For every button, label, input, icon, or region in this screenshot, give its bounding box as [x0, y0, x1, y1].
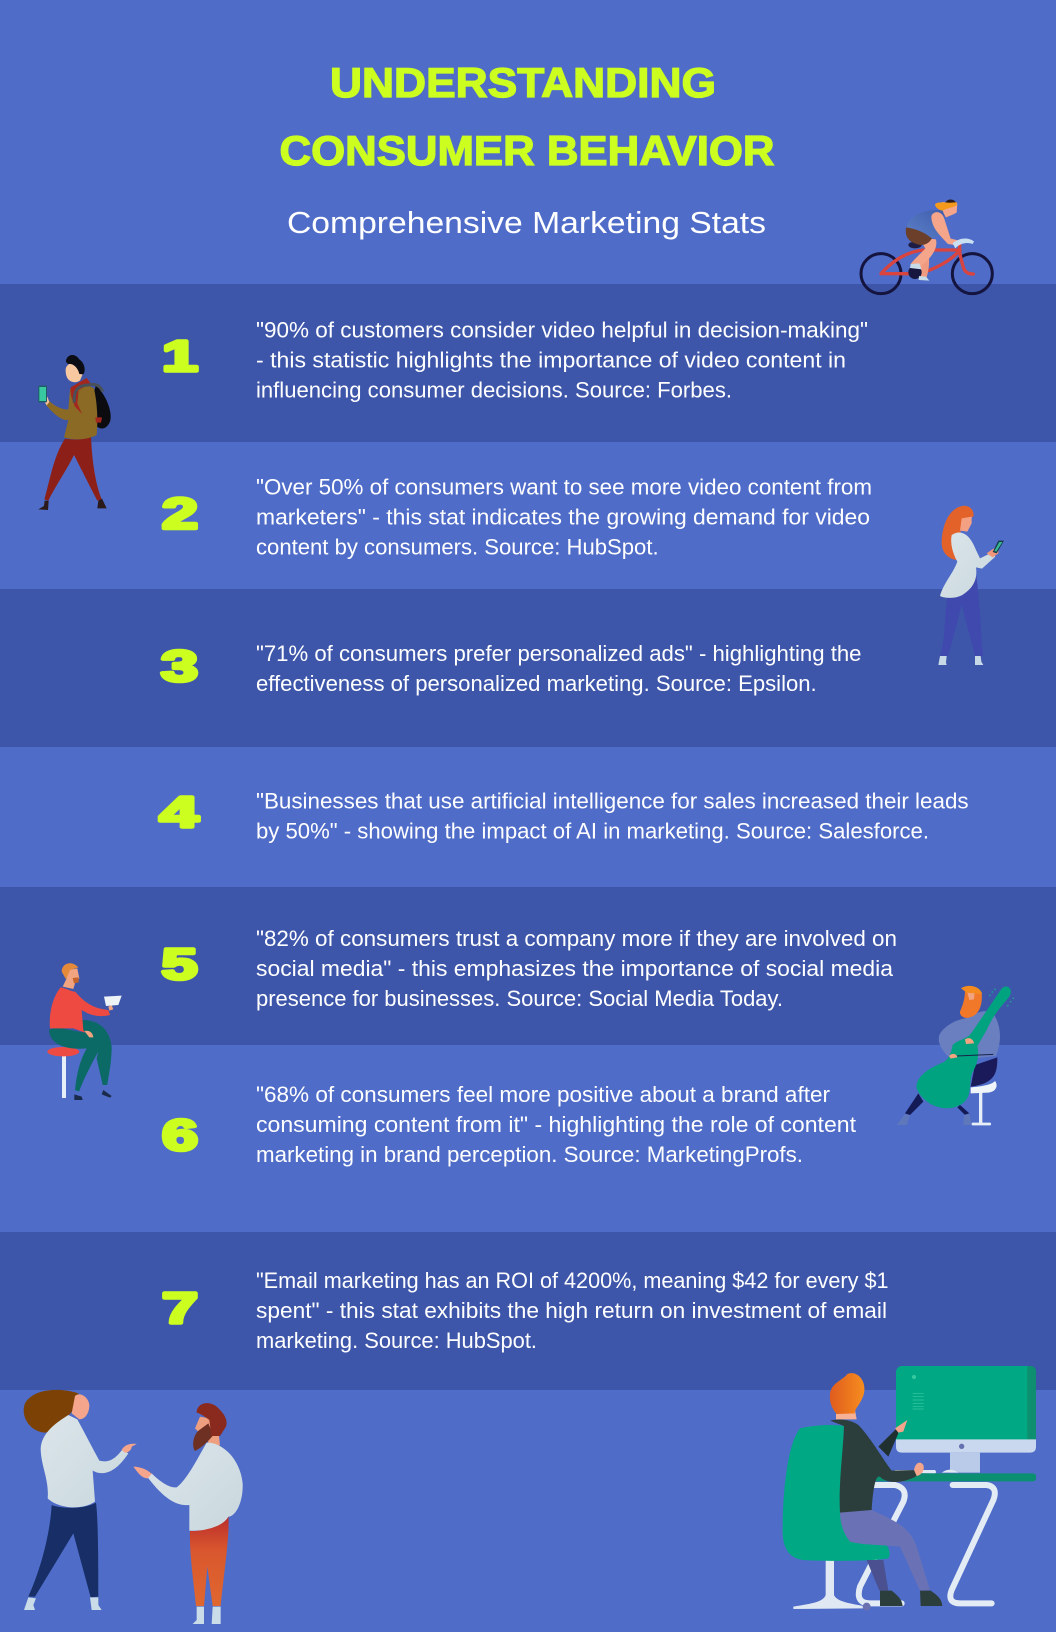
- icon: woman with phone: [938, 506, 1004, 665]
- text 7: spent" - this stat exhibits the high return on investment of email: [256, 1298, 887, 1323]
- number 7: 7: [162, 1284, 198, 1333]
- text 4: by 50%" - showing the impact of AI in marketing. Source: Salesforce.: [256, 819, 929, 844]
- text 6: "68% of consumers feel more positive about a brand after: [256, 1082, 830, 1107]
- text 6: consuming content from it" - highlighting the role of content: [256, 1112, 856, 1137]
- icon: cyclist: [861, 200, 992, 294]
- title: UNDERSTANDING: [330, 59, 716, 106]
- monitor: [896, 1366, 1036, 1473]
- desk legs: [859, 1485, 995, 1603]
- text 1: "90% of customers consider video helpful in decision-making": [256, 318, 868, 342]
- row 2: [162, 475, 872, 560]
- row 3: [161, 641, 862, 696]
- text 1: [256, 318, 868, 402]
- icon: man reading on stool: [47, 963, 122, 1100]
- icon: cellist: [897, 986, 1014, 1125]
- text 3: "71% of consumers prefer personalized ads" - highlighting the: [256, 641, 862, 666]
- text 2: "Over 50% of consumers want to see more video content from: [256, 475, 872, 500]
- text 5: [256, 926, 897, 1011]
- text 7: [256, 1268, 888, 1353]
- text 5: social media" - this emphasizes the importance of social media: [256, 956, 894, 981]
- person: man: [133, 1403, 243, 1624]
- text 4: [256, 789, 969, 844]
- text 2: content by consumers. Source: HubSpot.: [256, 535, 659, 560]
- number 1: 1: [162, 332, 198, 381]
- number 3: 3: [161, 642, 198, 691]
- band: row 1: [0, 284, 1056, 442]
- icon: man at computer desk: [783, 1366, 1036, 1611]
- text 7: "Email marketing has an ROI of 4200%, meaning $42 for every $1: [256, 1268, 888, 1293]
- text 1: influencing consumer decisions. Source: Forbes.: [256, 378, 732, 402]
- number 4: 4: [160, 788, 199, 837]
- text 1: - this statistic highlights the importance of video content in: [256, 348, 846, 372]
- desk top: [872, 1473, 1036, 1481]
- text 6: [256, 1082, 856, 1167]
- text 7: marketing. Source: HubSpot.: [256, 1328, 537, 1353]
- row 4: [160, 788, 969, 844]
- text 4: "Businesses that use artificial intelligence for sales increased their leads: [256, 789, 969, 814]
- icon: two people talking: [24, 1390, 243, 1624]
- person: woman: [24, 1390, 137, 1610]
- text 2: marketers" - this stat indicates the growing demand for video: [256, 505, 870, 530]
- band: row 7: [0, 1232, 1056, 1390]
- keyboard: [893, 1470, 958, 1473]
- number 6: 6: [162, 1111, 198, 1160]
- text 5: presence for businesses. Source: Social Media Today.: [256, 986, 783, 1011]
- text 2: [256, 475, 872, 560]
- text 3: [256, 641, 862, 696]
- text 3: effectiveness of personalized marketing. Source: Epsilon.: [256, 671, 817, 696]
- subtitle: Comprehensive Marketing Stats: [287, 205, 766, 240]
- number 5: 5: [162, 940, 198, 989]
- icon: walking man with phone and backpack: [38, 355, 111, 510]
- seated man: [830, 1373, 942, 1606]
- text 5: "82% of consumers trust a company more if they are involved on: [256, 926, 897, 951]
- row 5: [162, 926, 897, 1011]
- title: CONSUMER BEHAVIOR: [280, 127, 774, 174]
- row 7: [162, 1268, 888, 1353]
- title: [280, 59, 774, 174]
- number 2: 2: [162, 490, 198, 538]
- band: row 5: [0, 887, 1056, 1045]
- row 6: [162, 1082, 856, 1167]
- text 6: marketing in brand perception. Source: MarketingProfs.: [256, 1142, 803, 1167]
- band: row 3: [0, 589, 1056, 747]
- row 1: [162, 318, 868, 402]
- chair: [783, 1425, 890, 1611]
